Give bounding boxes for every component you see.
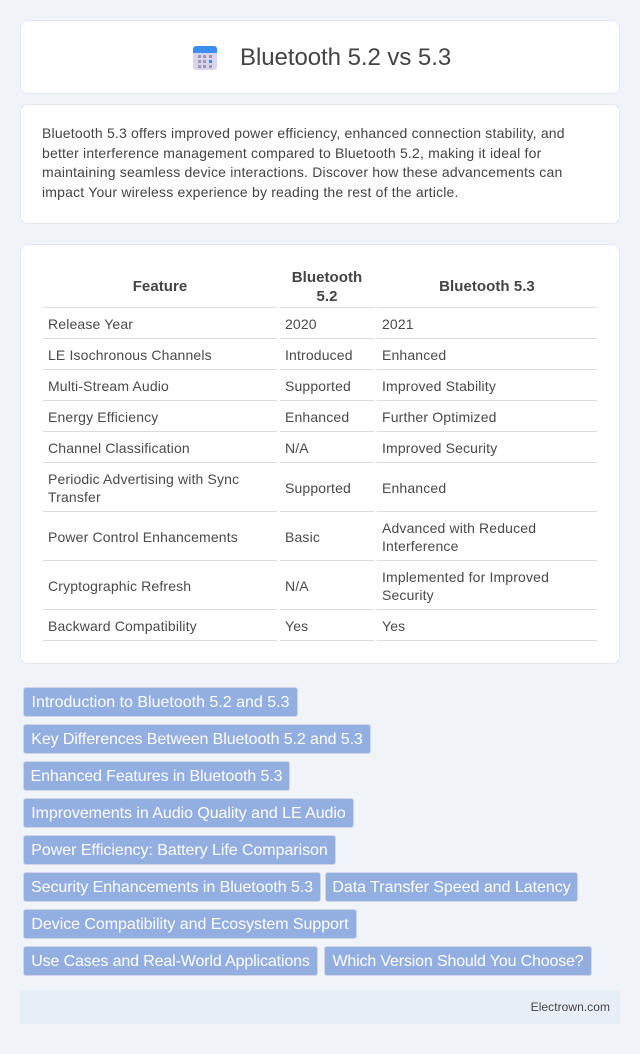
row: cryptographic refresh: Security: [382, 587, 434, 603]
link: introduction: Introduction to Bluetooth 5.2 and 5.3: [32, 694, 289, 711]
icon: calendar app: [193, 46, 217, 70]
row: power control enhancements: Basic: [285, 529, 320, 545]
row: release year: [48, 316, 414, 332]
link: security enhancements: Security Enhancements in Bluetooth 5.3: [31, 879, 313, 896]
table header: Bluetooth 5.2: Bluetooth 5.2: [292, 269, 362, 305]
row: backward compatibility: [48, 618, 405, 634]
intro paragraph: better interference management compared to Bluetooth 5.2, making it ideal for: [42, 145, 541, 161]
footer: [20, 990, 620, 1024]
table header: feature: Feature: [133, 278, 187, 295]
link: device compatibility: [23, 909, 357, 939]
row: release year: 2020: [285, 316, 317, 332]
row: power control enhancements: Advanced with Reduced: [382, 520, 536, 536]
row: power control enhancements: Power Control Enhancements: [48, 529, 238, 545]
row: multi-stream audio: Improved Stability: [382, 378, 496, 394]
link: key differences: Key Differences Between Bluetooth 5.2 and 5.3: [31, 731, 363, 748]
row: cryptographic refresh: Cryptographic Refresh: [48, 578, 191, 594]
row: energy efficiency: [48, 409, 497, 425]
row: release year: Release Year: [48, 316, 133, 332]
row: power control enhancements: [48, 520, 536, 554]
link: enhanced features: Enhanced Features in Bluetooth 5.3: [31, 768, 282, 785]
row: backward compatibility: Yes: [285, 618, 308, 634]
link: enhanced features: [23, 761, 290, 791]
link: introduction: [23, 687, 298, 717]
link: data transfer: [325, 872, 578, 902]
row: channel classification: Improved Security: [382, 440, 497, 456]
row: release year: 2021: [382, 316, 414, 332]
row: periodic advertising with sync transfer: Periodic Advertising with Sync: [48, 471, 239, 487]
link: security enhancements: [23, 872, 321, 902]
row: cryptographic refresh: N/A: [285, 578, 309, 594]
row: power control enhancements: Interference: [382, 538, 459, 554]
intro text panel: [20, 104, 620, 224]
link: power efficiency: Power Efficiency: Battery Life Comparison: [31, 842, 328, 859]
title card: [20, 20, 620, 94]
link: power efficiency: [23, 835, 336, 865]
row: backward compatibility: Yes: [382, 618, 405, 634]
intro paragraph: maintaining seamless device interactions. Discover how these advancements can: [42, 164, 562, 180]
intro paragraph: impact Your wireless experience by reading the rest of the article.: [42, 184, 459, 200]
topic links: [23, 687, 592, 976]
comparison table panel: [20, 244, 620, 664]
row: periodic advertising with sync transfer: Supported: [285, 480, 351, 496]
row: LE isochronous channels: Enhanced: [382, 347, 446, 363]
row: cryptographic refresh: [48, 569, 549, 603]
link: key differences: [23, 724, 371, 754]
intro paragraph: [42, 125, 565, 200]
link: use cases: Use Cases and Real-World Applications: [31, 953, 310, 970]
link: which version: Which Version Should You Choose?: [332, 953, 584, 970]
row: periodic advertising with sync transfer: Transfer: [48, 489, 101, 505]
row: multi-stream audio: [48, 378, 496, 394]
row: channel classification: Channel Classification: [48, 440, 190, 456]
row: energy efficiency: Further Optimized: [382, 409, 497, 425]
link: device compatibility: Device Compatibility and Ecosystem Support: [31, 916, 349, 933]
table header: Bluetooth 5.3: Bluetooth 5.3: [439, 278, 535, 295]
row: multi-stream audio: Supported: [285, 378, 351, 394]
row: LE isochronous channels: [48, 347, 446, 363]
row: LE isochronous channels: Introduced: [285, 347, 353, 363]
title: Bluetooth 5.2 vs 5.3: [240, 44, 451, 71]
intro paragraph: Bluetooth 5.3 offers improved power efficiency, enhanced connection stability, and: [42, 125, 565, 141]
row: multi-stream audio: Multi-Stream Audio: [48, 378, 169, 394]
row: backward compatibility: Backward Compatibility: [48, 618, 197, 634]
row: energy efficiency: Energy Efficiency: [48, 409, 158, 425]
link: which version: [324, 946, 592, 976]
link: data transfer: Data Transfer Speed and Latency: [332, 879, 571, 896]
row: cryptographic refresh: Implemented for Improved: [382, 569, 549, 585]
link: audio quality: [23, 798, 354, 828]
link: audio quality: Improvements in Audio Quality and LE Audio: [31, 805, 346, 822]
row: energy efficiency: Enhanced: [285, 409, 349, 425]
footer credit: Electrown.com: [531, 1000, 610, 1014]
link: use cases: [23, 946, 318, 976]
row: channel classification: [48, 440, 498, 456]
row: LE isochronous channels: LE Isochronous Channels: [48, 347, 212, 363]
row: periodic advertising with sync transfer: [48, 471, 446, 505]
row: channel classification: N/A: [285, 440, 309, 456]
row: periodic advertising with sync transfer: Enhanced: [382, 480, 446, 496]
